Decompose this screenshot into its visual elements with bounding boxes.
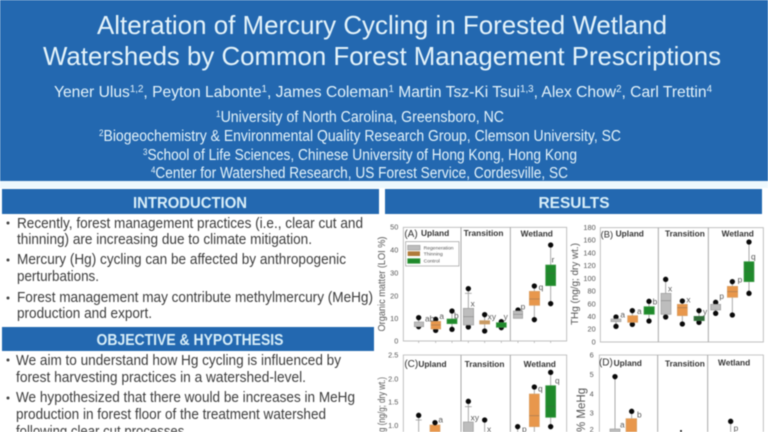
y axis ticks A: 50	[390, 223, 398, 232]
authors: Martin Tsz-Ki Tsui	[394, 84, 520, 101]
boxes wetland C	[515, 370, 560, 432]
panel titles C: Wetland	[524, 359, 556, 369]
boxes upland B	[611, 297, 658, 329]
boxes transition C	[463, 399, 492, 432]
panel titles A: Upland	[421, 228, 449, 238]
title	[43, 10, 721, 71]
affiliations: School of Life Sciences, Chinese University of Hong Kong, Hong Kong	[147, 147, 577, 164]
panel titles C: Upland	[418, 359, 447, 369]
boxes wetland B: p	[738, 275, 743, 285]
authors: Yener Ulus	[54, 84, 132, 101]
panel titles D: (D)	[599, 358, 613, 369]
boxes upland B: a	[620, 309, 625, 319]
boxes upland A	[414, 308, 459, 333]
authors: , Alex Chow	[534, 84, 617, 101]
y axis label C: g (ng/g; dry wt.)	[376, 377, 388, 432]
boxes upland D: b	[637, 410, 642, 420]
boxes transition C: xy	[471, 412, 480, 422]
panel: objective and hypothesis: We aim to understand how Hg cycling is influenced by	[16, 353, 342, 369]
title: Watersheds by Common Forest Management Prescriptions	[43, 41, 721, 71]
y axis ticks C: 2.5	[388, 351, 398, 360]
affiliations: 1	[216, 109, 221, 119]
y axis ticks B	[583, 223, 596, 346]
chart A: organic matter	[390, 223, 567, 345]
y axis ticks A: 40	[390, 246, 398, 255]
y axis ticks B: 0	[592, 337, 596, 346]
authors: , Peyton Labonte	[143, 84, 262, 101]
boxes wetland B: p	[719, 291, 724, 301]
y axis ticks C: 1.0	[388, 421, 398, 430]
boxes transition B: x	[686, 295, 691, 305]
boxes upland A: a	[439, 311, 444, 321]
boxes upland C	[416, 413, 443, 432]
y axis ticks C: 1.5	[388, 398, 398, 407]
y axis ticks D: 3	[590, 408, 594, 417]
boxes wetland B: q	[751, 252, 756, 262]
panel titles C: Transition	[465, 359, 504, 369]
panel titles A	[404, 228, 553, 240]
boxes transition and wetland D	[680, 419, 739, 432]
affiliations: 3	[143, 147, 147, 157]
panel: introduction: thinning) are increasing due to climate mitigation.	[17, 232, 312, 248]
results heading: RESULTS	[538, 195, 610, 212]
y axis ticks D	[590, 351, 594, 432]
panel: objective and hypothesis: We hypothesized that there would be increases in MeHg	[16, 390, 355, 406]
panel: objective and hypothesis: production in forest floor of the treatment watershed	[16, 407, 326, 423]
boxes wetland C: q	[555, 375, 560, 385]
legend	[406, 242, 459, 266]
chart C: methylmercury	[388, 351, 567, 432]
boxes upland D	[610, 374, 642, 432]
boxes transition A: y	[504, 312, 509, 322]
y axis ticks B: 100	[583, 274, 596, 283]
boxes transition A: x	[471, 298, 476, 308]
panel titles A: Transition	[464, 228, 503, 238]
panel: introduction: perturbations.	[17, 269, 99, 285]
y axis ticks C: 2.0	[388, 374, 398, 383]
boxes upland D: a	[620, 420, 625, 430]
y axis ticks C	[388, 351, 398, 430]
affiliations: 2	[99, 128, 104, 138]
boxes upland B: a	[637, 306, 642, 316]
boxes upland A: ab	[425, 314, 435, 324]
authors: 1,3	[520, 84, 534, 95]
boxes upland A: b	[454, 310, 459, 320]
boxes transition A	[463, 286, 509, 334]
boxes transition B: x	[668, 283, 673, 293]
results heading	[385, 189, 762, 214]
header banner	[0, 0, 768, 182]
authors: , James Coleman	[267, 84, 388, 101]
panel: introduction: production and export.	[17, 306, 152, 322]
panel: introduction	[2, 189, 379, 322]
affiliations: University of North Carolina, Greensboro, NC	[221, 109, 504, 126]
panel titles C	[404, 359, 556, 370]
y axis label D: % MeHg	[576, 388, 588, 432]
panel titles B: Upland	[616, 229, 644, 239]
panel: introduction: INTRODUCTION	[133, 195, 247, 212]
panel titles A: Wetland	[521, 228, 553, 238]
panel titles A: (A)	[404, 229, 418, 240]
y axis ticks A: 0	[394, 336, 398, 345]
boxes wetland A	[513, 242, 556, 322]
y axis ticks B: 40	[588, 312, 596, 321]
boxes transition A: xy	[488, 311, 497, 321]
boxes wetland B	[711, 239, 756, 318]
panel titles B	[601, 229, 754, 239]
panel: objective and hypothesis	[2, 327, 374, 432]
panel titles B: Wetland	[722, 229, 754, 239]
boxes wetland A: p	[521, 301, 526, 311]
panel: objective and hypothesis: forest harvesting practices in a watershed-level.	[16, 370, 306, 386]
authors: 1	[262, 84, 267, 95]
y axis ticks B: 80	[588, 287, 596, 296]
panel titles D: Upland	[614, 358, 642, 368]
panel titles B: Transition	[665, 229, 705, 239]
y axis ticks A: 30	[390, 268, 398, 277]
y axis ticks A	[390, 223, 398, 345]
panel: introduction: Recently, forest management practices (i.e., clear cut and	[17, 216, 363, 232]
y axis ticks D: 5	[590, 370, 594, 379]
affiliations	[99, 109, 621, 182]
y axis ticks B: 120	[583, 261, 596, 270]
authors: , Carl Trettin	[622, 84, 707, 101]
panel titles D	[599, 357, 750, 369]
y axis ticks B: 140	[583, 248, 596, 257]
panel titles D: Wetland	[718, 357, 750, 367]
authors: 2	[616, 84, 622, 95]
y axis ticks D: 6	[590, 351, 594, 360]
affiliations: Biogeochemistry & Environmental Quality Research Group, Clemson University, SC	[104, 128, 621, 145]
y axis ticks B: 60	[588, 299, 596, 308]
affiliations: 4	[151, 165, 155, 175]
boxes upland C: a	[438, 415, 443, 425]
panel: introduction: Mercury (Hg) cycling can be affected by anthropogenic	[17, 252, 346, 268]
y axis label B: THg (ng/g; dry wt.)	[569, 243, 581, 325]
boxes wetland C: q	[538, 384, 543, 394]
boxes wetland A: q	[539, 282, 544, 292]
authors: 4	[707, 84, 712, 95]
affiliations: Center for Watershed Research, US Forest Service, Cordesville, SC	[155, 165, 568, 182]
y axis label A: Organic matter (LOI %)	[376, 236, 388, 332]
panel: objective and hypothesis: OBJECTIVE & HYPOTHESIS	[96, 332, 284, 349]
legend: Thinning	[424, 252, 443, 258]
y axis ticks B: 20	[588, 325, 596, 334]
boxes upland B: b	[653, 297, 658, 307]
y axis ticks A: 10	[390, 314, 398, 323]
legend: Control	[424, 258, 440, 264]
panel titles B: (B)	[601, 229, 613, 239]
y axis ticks D: 4	[590, 389, 594, 398]
title: Alteration of Mercury Cycling in Forested Wetland	[97, 10, 667, 40]
panel titles D: Transition	[665, 359, 705, 369]
legend: Regeneration	[424, 245, 454, 251]
panel titles C: (C)	[404, 359, 418, 370]
chart B: total mercury	[583, 223, 763, 346]
boxes transition B: y	[703, 307, 708, 317]
y axis ticks A: 20	[390, 291, 398, 300]
boxes wetland A: r	[552, 254, 555, 264]
panel: introduction: Forest management may contribute methylmercury (MeHg)	[17, 290, 373, 306]
chart D: percent methylmercury	[590, 351, 763, 432]
boxes transition B	[661, 277, 708, 327]
authors: 1,2	[130, 84, 144, 95]
y axis ticks B: 160	[583, 236, 596, 245]
y axis ticks B: 180	[583, 223, 596, 232]
authors: 1	[388, 84, 394, 95]
